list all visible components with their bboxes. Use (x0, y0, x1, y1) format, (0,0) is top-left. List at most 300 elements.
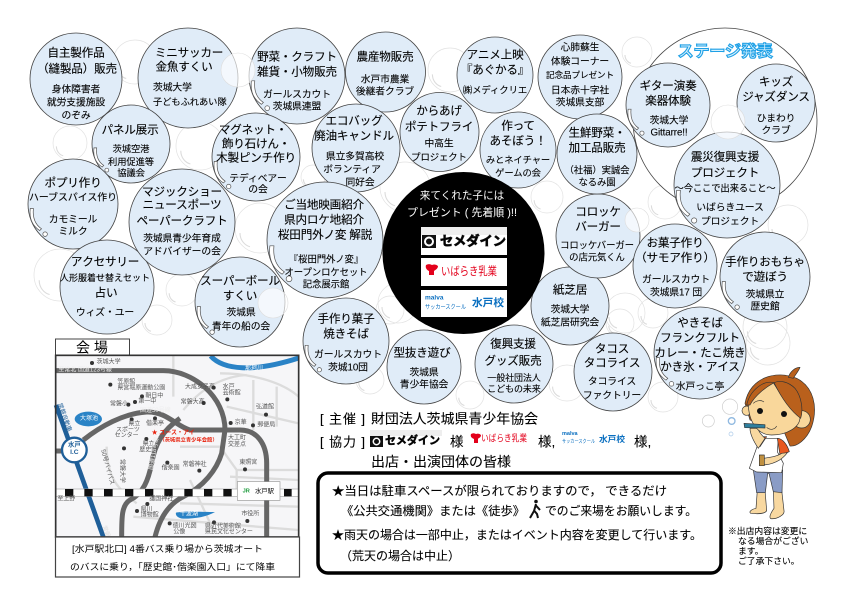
organizer: 青少年協会 (400, 378, 449, 390)
organizer: 後継者クラブ (356, 84, 414, 98)
organizer text: 財団法人茨城県青少年協会 (371, 412, 538, 426)
organizer: 記念展示館 (303, 278, 349, 290)
organizer: Gittarre!! (650, 128, 688, 138)
panel: venue map (56, 339, 300, 577)
event name: エコバッグ (326, 114, 383, 128)
map labels: 県立 (143, 440, 155, 448)
bubble: reconstruction goods (475, 325, 553, 403)
organizer: 茨城大学 (650, 114, 689, 126)
bubble: croquette burger (556, 194, 640, 278)
bubble: magnet and soap (212, 113, 300, 201)
organizer: こどもの未来 (487, 383, 541, 394)
map labels: 第一中 (138, 397, 156, 405)
map labels: 博物館 (141, 510, 159, 518)
footnote: ご了承下さい。 (738, 555, 800, 566)
event name: 木製ピンチ作り (216, 150, 296, 164)
organizer (541, 302, 599, 328)
JR Mito station: 水戸駅 (255, 486, 275, 495)
map labels: 芸術館 (223, 388, 241, 396)
bubble: make and play (480, 112, 556, 188)
bubble: potpourri (28, 159, 118, 249)
map labels: 徳川光圀 (173, 522, 197, 530)
event name: 『あぐかる』 (461, 64, 529, 76)
organizer: ウィズ・ユー (76, 306, 134, 318)
cooperator logos row: 様, (538, 434, 555, 450)
bubble: kids jazz dance (737, 64, 815, 142)
organizer: 紙芝居研究会 (541, 316, 599, 328)
event name: 手作り菓子 (318, 312, 375, 326)
event name: 復興支援 (490, 336, 536, 350)
organizer: みとネイチャー (486, 155, 550, 165)
cooperator logos row: 様, (634, 434, 651, 450)
map labels: 県川 (141, 506, 153, 513)
logo: Cemedine: セメダイン (440, 234, 506, 248)
map labels: 至常北 国道123号線 (58, 366, 112, 374)
organizer: 『桜田門外ノ変』 (289, 254, 363, 264)
organizer (400, 366, 449, 390)
event name: カレー・たこ焼き (654, 346, 746, 360)
organizer: ガールスカウト (263, 88, 331, 100)
event name: ご当地映画紹介 (284, 198, 364, 212)
event name: 廃油キャンドル (314, 128, 394, 142)
organizer: いばらきユース (696, 202, 764, 214)
event name (200, 274, 280, 302)
map labels: 偕楽亭 (146, 419, 164, 427)
event name (216, 122, 296, 164)
cooperators: [ 協力 ] (320, 434, 365, 450)
event name: 体験コーナー (551, 54, 609, 68)
organizer: 茨城県連盟 (273, 100, 322, 112)
bubble: sweets making (633, 224, 717, 308)
event name: （サモア作り） (635, 250, 715, 264)
event name: すくい (223, 290, 257, 302)
Mito IC marker: I.C (70, 449, 79, 456)
notice box: ★当日は駐車スペースが限られておりますので， できるだけ (332, 483, 667, 498)
bubble: local films (267, 182, 383, 298)
event name (60, 256, 150, 300)
organizer: 茨城大学 (153, 80, 192, 94)
cooperator logos row: 様 (450, 434, 464, 450)
organizer: アドバイザーの会 (143, 244, 221, 258)
event name (654, 316, 746, 374)
event name: キッズ (759, 74, 794, 88)
map labels: 郵便局 (257, 420, 275, 428)
organizer (263, 88, 331, 112)
notice box (318, 473, 721, 573)
event name: バーガー (575, 220, 621, 234)
venue marker (152, 430, 218, 443)
map labels: 東照宮 (239, 458, 257, 466)
organizer: 協議会 (117, 167, 145, 178)
cooperator logos row: 水戸校 (599, 434, 625, 444)
organizer (285, 254, 367, 290)
event name: 加工品販売 (569, 142, 625, 154)
event name: 占い (95, 286, 117, 300)
map labels: センター (115, 431, 139, 439)
organizer: 青年の船の会 (212, 320, 270, 332)
organizer: ゲームの会 (495, 167, 541, 178)
organizer: の店元気くん (569, 252, 625, 262)
present text (407, 190, 517, 219)
bubble: cut-out play (387, 330, 461, 404)
organizer: タコライス (588, 376, 636, 388)
organizer: 茨城県立 (746, 288, 785, 300)
map (56, 355, 299, 544)
cooperator logos row (370, 430, 651, 450)
event name: かき氷・アイス (660, 360, 740, 374)
directions caption: [水戸駅北口] 4番バス乗り場から茨城オート (72, 543, 263, 554)
organizer: 身体障害者 (52, 82, 101, 96)
organizer: ファクトリー (583, 390, 641, 402)
bubble: fried chicken and potato (400, 92, 479, 172)
organizer: 利用促進等 (108, 156, 154, 167)
footnote: ます。 (738, 546, 764, 556)
event name: プロジェクト (691, 166, 759, 180)
event name: フランクフルト (660, 332, 740, 344)
event name: からあげ (416, 104, 462, 118)
organizer: 水戸っこ亭 (676, 380, 725, 392)
event name (640, 80, 697, 108)
map labels: 常磐大高 (181, 398, 205, 406)
map labels: 至上野 (57, 495, 75, 503)
railway (56, 489, 299, 496)
illustration: girl brushing teeth (702, 367, 815, 519)
map labels: 那珂川 (245, 364, 263, 372)
bubble: accessories (60, 240, 154, 334)
organizer (642, 274, 710, 298)
notice box: でのご来場をお願いします。 (545, 503, 697, 518)
organizer: 県立多賀高校 (326, 150, 384, 162)
event name (584, 342, 640, 370)
organizer: クラブ (761, 124, 791, 136)
bubble: eco bag (312, 104, 400, 192)
event name (485, 336, 541, 368)
organizer: のぞみ (61, 110, 91, 122)
organizer: 茨城県青少年育成 (143, 232, 221, 244)
panel: present for children (382, 172, 544, 334)
event name: 記念品プレゼント (546, 69, 614, 80)
event name: マジックショー (142, 186, 222, 198)
event name: 紙芝居 (553, 282, 587, 296)
event name: マグネット・ (219, 122, 287, 136)
map labels: 常磐自動車 (56, 402, 74, 433)
map labels: 公像 (173, 527, 185, 535)
Mito IC marker: 水戸 (68, 439, 81, 448)
organizer (212, 306, 270, 332)
event name (257, 50, 337, 78)
organizer: コロッケバーガー (560, 240, 634, 250)
logo: Ibaraki Nyugyo (421, 258, 507, 286)
organizer: 水戸市農業 (361, 72, 410, 86)
map labels: 県立 (128, 420, 140, 428)
event name (635, 236, 715, 264)
logo: malva soccer school: 水戸校 (472, 296, 505, 309)
cooperators (320, 430, 651, 470)
organizer: 茨城県17 団 (650, 286, 702, 298)
logo: Ibaraki Nyugyo: いばらき乳業 (441, 265, 497, 278)
organizer (551, 84, 609, 108)
organizer (314, 348, 382, 374)
event name: 作って (501, 120, 535, 132)
venue tab heading: 会 場 (76, 340, 108, 356)
organizer: 茨城県 (409, 366, 439, 378)
map labels: 交差点 (228, 440, 246, 448)
event name (405, 104, 473, 134)
map labels: 県近代美術館 (205, 522, 241, 530)
event name: ペーパークラフト (136, 214, 228, 228)
bubble: picture-card show (531, 267, 609, 345)
event name: ギター演奏 (640, 80, 697, 92)
event name: やきそば (677, 316, 723, 330)
map labels: 歴史館 (139, 446, 157, 454)
map labels: 市役所 (241, 510, 259, 518)
map labels: 笠原館 (117, 378, 135, 386)
map labels: 県民文化センター (205, 528, 253, 536)
Mito IC marker (62, 438, 87, 462)
event name: 焼きそば (323, 328, 369, 340)
organizer: 一般社団法人 (487, 372, 541, 383)
organizer (229, 172, 287, 196)
footnote: ※出店内容は変更に (728, 525, 807, 536)
event name: アクセサリー (71, 256, 139, 268)
event name (318, 312, 375, 340)
organizer: ガールスカウト (642, 274, 710, 286)
notice box: ★雨天の場合は一部中止，またはイベント内容を変更して行います。 (332, 527, 702, 542)
organizer (49, 214, 98, 238)
bubble: sweets and yakisoba (303, 298, 389, 384)
event name: 心肺蘇生 (561, 40, 600, 54)
organizer: カモミール (49, 214, 98, 226)
organizer (565, 164, 630, 188)
organizer: 中高生 (424, 136, 454, 150)
organizer: 歴史館 (750, 300, 780, 312)
event name: タコス (595, 342, 629, 356)
icon: walking person (530, 500, 540, 518)
organizer: 茨城空港 (113, 143, 150, 154)
bubble: CPR experience (538, 35, 622, 119)
event name (314, 114, 394, 142)
organizer (583, 376, 641, 402)
map labels: 偕楽園 (162, 464, 180, 472)
logo: malva soccer school: サッカースクール (425, 304, 466, 311)
bubble: magic show (129, 169, 235, 275)
organizer (47, 82, 105, 122)
organizer: プロジェクト (411, 152, 467, 162)
bubble: yakisoba and frankfurter (654, 307, 746, 399)
map labels (56, 357, 275, 544)
organizer (487, 372, 541, 394)
organizer (143, 232, 221, 258)
event name: 人形服着せ替えセット (60, 272, 150, 283)
organizer (696, 202, 764, 228)
JR Mito station (237, 482, 280, 500)
organizer: 同好会 (345, 176, 375, 188)
organizer: なるみ園 (578, 176, 616, 188)
map labels: 茨城大学 (97, 357, 121, 365)
river (211, 356, 299, 368)
event name: アニメ上映 (467, 48, 524, 62)
logo: malva soccer school: malva (425, 294, 444, 302)
organizer: ㈱メディクリエ (463, 84, 527, 96)
JR Mito station: JR (243, 489, 250, 495)
event name: で遊ぼう (742, 270, 788, 284)
organizer (560, 240, 634, 262)
bubble: tacos (574, 333, 652, 411)
organizer: プロジェクト (701, 216, 759, 228)
organizer (650, 114, 689, 138)
event name: 手作りおもちゃ (725, 254, 805, 268)
event name: （縫製品）販売 (37, 62, 117, 76)
map labels: 常磐小 (110, 400, 128, 408)
map labels: 国道118号線 (147, 436, 160, 471)
organizer: 日本赤十字社 (551, 84, 609, 96)
event name: あそぼう！ (490, 134, 546, 148)
organizer: テディベアー (229, 172, 287, 184)
map labels: 京華 (235, 418, 247, 426)
event name: コロッケ (575, 206, 621, 218)
venue marker: ★ ユース・アイ (152, 430, 195, 437)
cooperator logos row: いばらき乳業 (481, 432, 527, 444)
event name: ジャズダンス (742, 90, 810, 104)
venue tab heading (56, 339, 130, 356)
notice box: 《公共交通機関》または《徒歩》 (341, 503, 525, 518)
organizer: ガールスカウト (314, 348, 382, 360)
event name (725, 254, 805, 284)
present text: プレゼント ( 先着順 )!! (407, 206, 517, 219)
event name (569, 126, 625, 154)
organizer: 茨城大学 (551, 302, 590, 316)
organizer (411, 136, 467, 162)
event name: 震災復興支援 (691, 150, 760, 164)
bubble: disaster recovery project (674, 132, 780, 238)
background decorative bubbles (34, 37, 808, 412)
event name (461, 48, 529, 76)
bubble: panel exhibit (92, 105, 170, 183)
organizer: の会 (248, 182, 268, 196)
organizer: ひまわり (757, 112, 795, 124)
event name: スーパーボール (200, 274, 280, 288)
map labels: 弘道館 (256, 402, 274, 410)
logo: malva soccer school (421, 290, 507, 317)
event name: 雑貨・小物販売 (257, 64, 337, 78)
organizer: 茨城県支部 (556, 96, 605, 108)
event name (490, 120, 546, 148)
map labels: 50号バイパス (99, 449, 115, 486)
heading: stage: ステージ発表 (678, 42, 773, 60)
cooperators: 出店・出演団体の皆様 (371, 454, 511, 470)
notice box: （荒天の場合は中止） (340, 548, 460, 563)
organizer: ミルク (58, 226, 88, 238)
event name: ニュースポーツ (143, 198, 221, 212)
event name: 金魚すくい (156, 60, 212, 74)
bubble: fresh vegetables (557, 114, 637, 194)
footnote: なる場合がござい (738, 535, 809, 546)
footnote (728, 525, 809, 566)
event name (742, 74, 810, 104)
organizer (108, 143, 154, 178)
event name: グッズ販売 (485, 354, 541, 368)
event name: 野菜・クラフト (257, 50, 337, 64)
organizer (153, 80, 227, 107)
bubble: farm produce (346, 32, 426, 112)
map labels: 大成女子高 (185, 383, 215, 391)
map labels: 常磐神社 (183, 460, 207, 468)
organizer (746, 288, 785, 312)
event name (29, 176, 117, 204)
cooperator logos row: サッカースクール (562, 439, 595, 445)
map labels: 県営堀原運動公園 (117, 384, 165, 392)
bubble: mini soccer (138, 28, 238, 128)
event name: お菓子作り (647, 236, 703, 250)
organizer: （社福）実誠会 (565, 164, 630, 176)
organizer: 子どもふれあい隊 (153, 96, 227, 107)
roads (56, 371, 267, 537)
bubble: anime screening (457, 37, 533, 113)
organizer (486, 155, 550, 178)
expressway (56, 405, 103, 537)
map labels: 護国神社 (149, 495, 173, 503)
panel: stage performances (633, 28, 817, 212)
event name (575, 206, 621, 234)
organizer (757, 112, 795, 136)
directions caption: のバスに乗り，「歴史館･偕楽園入口」にて降車 (70, 561, 275, 572)
bubble: vegetables and crafts (249, 28, 345, 124)
organizer text: [ 主催 ] (320, 412, 365, 426)
present text: 来てくれた子には (420, 190, 505, 202)
directions caption (56, 537, 300, 577)
event name: 飾り石けん・ (222, 138, 290, 150)
event name (155, 46, 223, 74)
map labels: スポーツ (116, 426, 140, 434)
event name (37, 46, 117, 76)
event name: 生鮮野菜・ (569, 126, 625, 140)
map labels: 大工町 (228, 434, 246, 442)
event name: タコライス (584, 356, 640, 370)
event name: 型抜き遊び (394, 346, 451, 360)
event name: 県内ロケ地紹介 (284, 212, 364, 226)
organizer: 茨城県 (226, 306, 256, 318)
event name: 農産物販売 (357, 50, 413, 64)
event name: 楽器体験 (645, 94, 691, 108)
map labels: 水戸 (223, 382, 235, 390)
venue marker: （茨城県立青少年会館） (159, 436, 218, 443)
event name (278, 198, 373, 242)
cooperator logos row: malva (562, 431, 579, 437)
event name (675, 150, 775, 194)
lakes (75, 412, 102, 426)
bubble: handmade goods (30, 33, 122, 125)
bubble: guitar performance (626, 63, 710, 147)
map labels: 国道50号線 (140, 406, 171, 414)
event name: パネル展示 (102, 124, 158, 136)
translucent overlay bubbles (221, 53, 745, 318)
organizer: 就労支援施設 (47, 96, 105, 108)
organizer: ボランティア (323, 164, 381, 176)
event name (136, 186, 228, 228)
event name: 自主製作品 (48, 46, 104, 60)
event name: ミニサッカー (155, 46, 223, 60)
map labels: 朝日中 (145, 391, 163, 399)
event name (546, 40, 614, 80)
event name: ～今ここで出来ること～ (675, 182, 775, 194)
organizer: オープンロケセット (285, 266, 367, 278)
logo: Cemedine (421, 227, 507, 255)
bubble: super ball (195, 257, 285, 347)
event name: ポプリ作り (45, 176, 101, 190)
event name: ハーブスパイス作り (29, 190, 117, 204)
organizer: 茨城10団 (328, 362, 368, 374)
map labels: 常磐道 (101, 524, 114, 544)
